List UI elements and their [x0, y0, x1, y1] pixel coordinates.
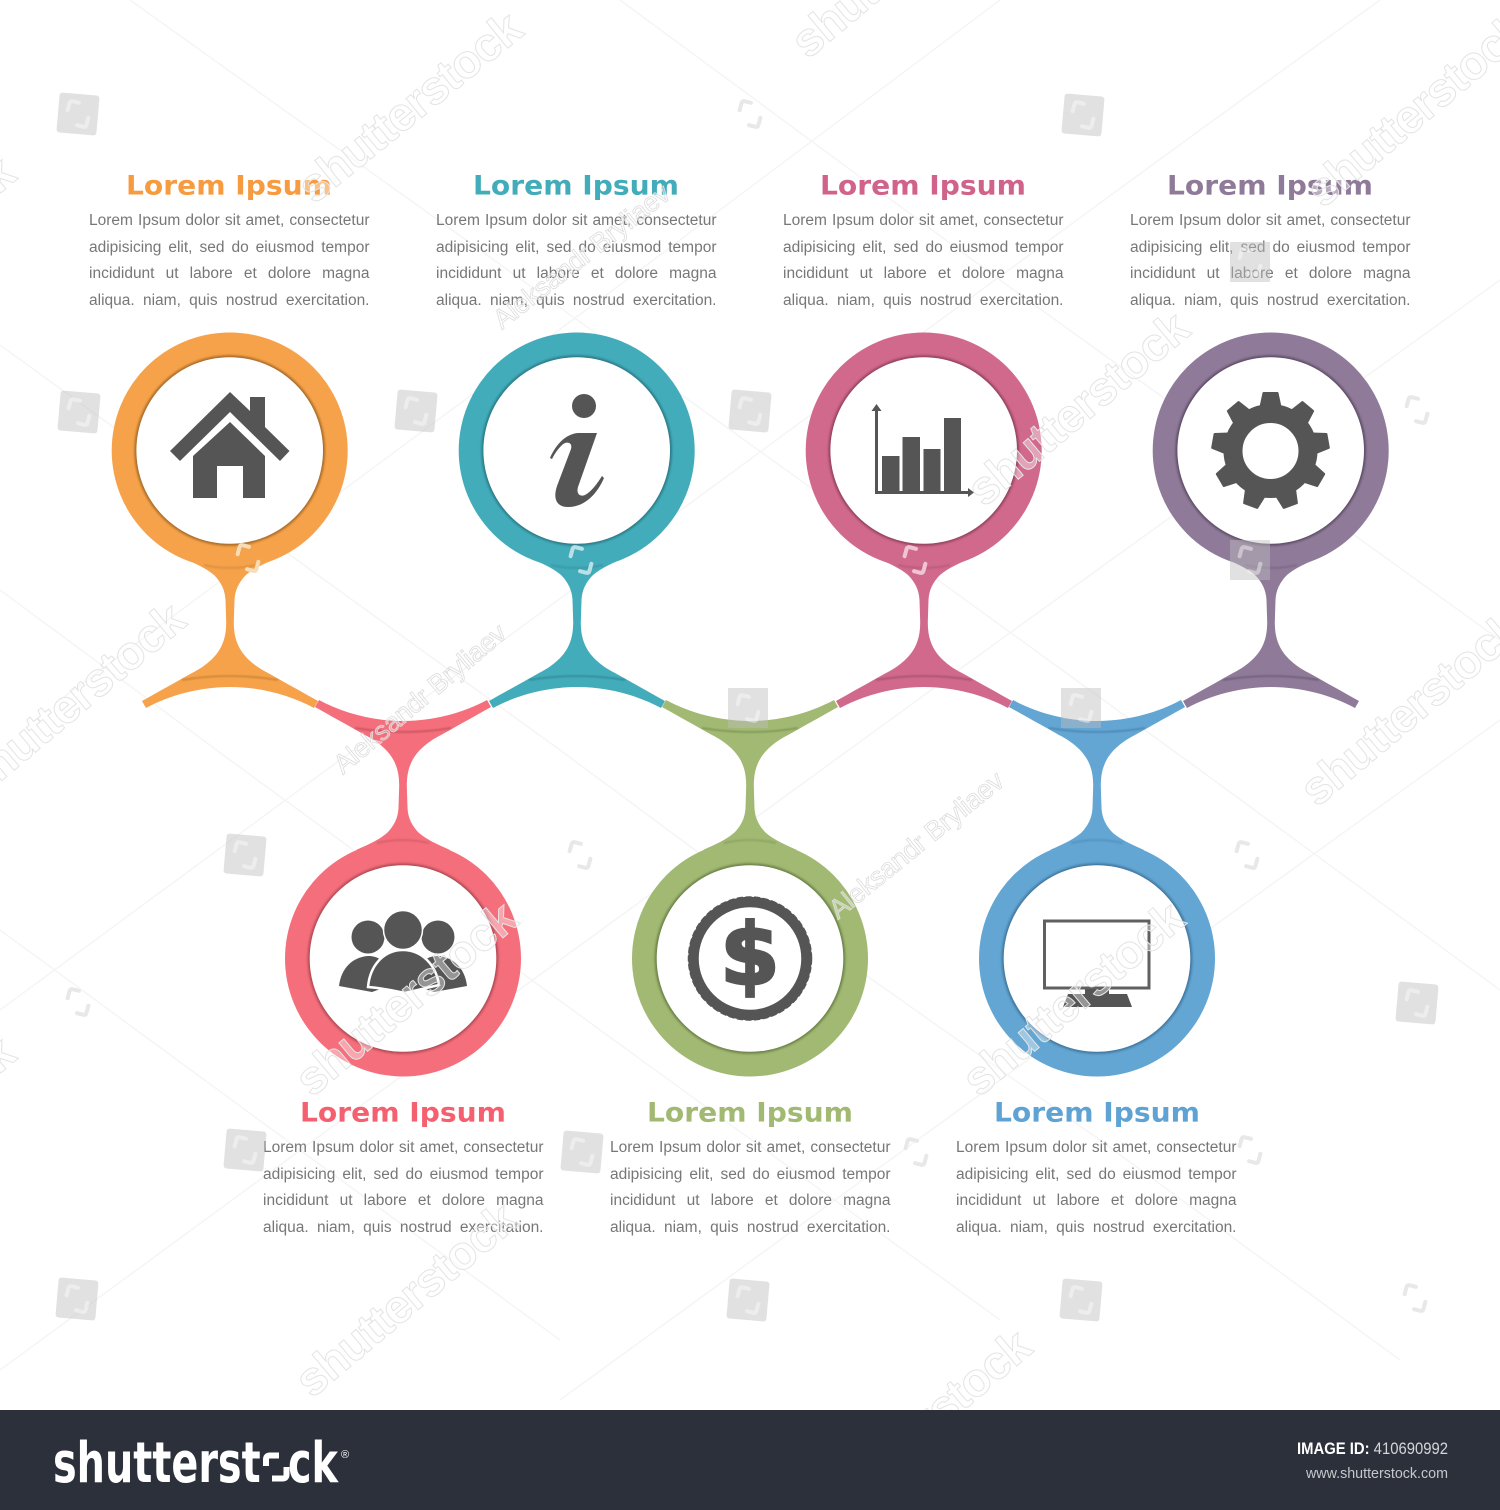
ring: purple — [1153, 332, 1389, 568]
panel: step 2 info — [436, 170, 717, 708]
footer bar — [0, 1410, 1500, 1510]
text block: step 4: Lorem Ipsum dolor sit amet, consectetur — [1130, 212, 1410, 229]
text block: step 2 — [436, 208, 717, 316]
heading: step 5: Lorem Ipsum — [300, 1098, 506, 1128]
text block: step 7: incididunt ut labore et dolore magna — [956, 1192, 1236, 1209]
text block: step 1: adipisicing elit, sed do eiusmod tempor — [89, 238, 370, 256]
watermark: stock photo text: shutterstock — [287, 0, 532, 213]
text block: step 6: Lorem Ipsum dolor sit amet, consectetur — [610, 1139, 890, 1156]
connector: pink stem and wave — [836, 558, 1012, 708]
ring: green — [632, 840, 868, 1076]
ring: teal — [459, 332, 695, 568]
watermark: square glyphs — [64, 101, 1430, 1313]
image id: IMAGE ID: 410690992 — [1297, 1439, 1448, 1458]
text block: step 3: adipisicing elit, sed do eiusmod tempor — [783, 238, 1064, 256]
registered mark: ® — [341, 1449, 349, 1461]
ring: coral — [285, 840, 521, 1076]
text block: step 2: adipisicing elit, sed do eiusmod tempor — [436, 238, 716, 256]
text block: step 7: aliqua. niam, quis nostrud exercitation. — [956, 1218, 1236, 1236]
heading: step 1: Lorem Ipsum — [126, 170, 332, 202]
connector: orange stem and wave — [142, 558, 318, 708]
icon: dollar coin — [690, 898, 810, 1019]
panel: step 3 chart — [783, 170, 1064, 708]
text block: step 3: aliqua. niam, quis nostrud exercitation. — [783, 292, 1064, 308]
watermark: stock photo text: Aleksandr Bryliaev — [823, 765, 1010, 925]
text block: step 7 — [956, 1135, 1237, 1243]
text block: step 6: aliqua. niam, quis nostrud exercitation. — [610, 1218, 890, 1236]
text block: step 6: incididunt ut labore et dolore magna — [610, 1192, 890, 1209]
heading: step 4: Lorem Ipsum — [1167, 170, 1373, 202]
heading: step 2: Lorem Ipsum — [473, 170, 679, 202]
text block: step 7: Lorem Ipsum dolor sit amet, consectetur — [956, 1139, 1236, 1156]
text block: step 3 — [783, 208, 1064, 316]
watermark: stock photo text: shutterstock — [284, 890, 527, 1106]
icon: info — [550, 394, 604, 507]
text block: step 4 — [1130, 208, 1411, 316]
heading: step 3: Lorem Ipsum — [820, 170, 1026, 202]
connector: teal stem and wave — [489, 558, 665, 708]
text block: step 1 — [89, 208, 370, 316]
text block: step 3: Lorem Ipsum dolor sit amet, consectetur — [783, 212, 1064, 229]
panel: step 4 settings — [1130, 170, 1411, 708]
text block: step 7: adipisicing elit, sed do eiusmod tempor — [956, 1166, 1236, 1182]
text block: step 3: incididunt ut labore et dolore magna — [783, 265, 1064, 282]
footer logo: shutterstock — [53, 1431, 339, 1496]
text block: step 1: incididunt ut labore et dolore magna — [89, 265, 370, 282]
text block: step 5: Lorem Ipsum dolor sit amet, consectetur — [263, 1139, 544, 1156]
text block: step 5: incididunt ut labore et dolore magna — [263, 1192, 544, 1209]
connector: coral stem and wave — [315, 700, 491, 850]
watermark: stock photo text: Aleksandr Bryliaev — [487, 178, 676, 335]
text block: step 6: adipisicing elit, sed do eiusmod tempor — [610, 1166, 890, 1182]
ring: blue — [979, 840, 1215, 1076]
panel: step 6 finance — [610, 700, 891, 1243]
heading: step 7: Lorem Ipsum — [994, 1098, 1200, 1128]
text block: step 2: aliqua. niam, quis nostrud exercitation. — [436, 292, 716, 308]
watermark: loose glyphs — [65, 101, 1430, 1311]
icon: people — [339, 910, 467, 993]
icon: dollar coin: $ — [720, 906, 780, 1005]
watermark: stock photo text: shutterstock — [956, 300, 1199, 516]
watermark: stock photo text: Aleksandr Bryliaev — [328, 617, 513, 780]
text block: step 5 — [263, 1135, 544, 1243]
panel: step 7 monitor — [956, 700, 1237, 1243]
icon: monitor — [1044, 921, 1149, 1007]
ring: orange — [112, 332, 348, 568]
text block: step 4: incididunt ut labore et dolore magna — [1130, 265, 1410, 282]
text block: step 2: Lorem Ipsum dolor sit amet, consectetur — [436, 212, 716, 229]
panel: step 1 home — [89, 170, 370, 708]
text block: step 4: adipisicing elit, sed do eiusmod tempor — [1130, 238, 1410, 256]
watermark: grey squares — [55, 92, 1439, 1322]
connector: green stem and wave — [662, 700, 838, 850]
watermark: stock photo text: shutterstock — [284, 1191, 527, 1407]
text block: step 1: aliqua. niam, quis nostrud exercitation. — [89, 292, 370, 308]
watermark: stock photo text: shutterstock — [951, 890, 1194, 1106]
text block: step 5: aliqua. niam, quis nostrud exercitation. — [263, 1218, 544, 1236]
panel: step 5 team — [263, 700, 544, 1243]
text block: step 2: incididunt ut labore et dolore magna — [436, 265, 716, 282]
connector: purple stem and wave — [1183, 558, 1359, 708]
website: www.shutterstock.com — [1305, 1465, 1448, 1482]
text block: step 1: Lorem Ipsum dolor sit amet, consectetur — [89, 212, 370, 229]
icon: bar chart — [872, 404, 974, 497]
icon: gear — [1212, 393, 1329, 509]
text block: step 4: aliqua. niam, quis nostrud exercitation. — [1130, 292, 1410, 308]
icon: home — [170, 392, 290, 498]
ring: pink — [806, 332, 1042, 568]
text block: step 5: adipisicing elit, sed do eiusmod tempor — [263, 1166, 544, 1182]
heading: step 6: Lorem Ipsum — [647, 1098, 853, 1128]
connector: blue stem and wave — [1009, 700, 1185, 850]
text block: step 6 — [610, 1135, 891, 1243]
